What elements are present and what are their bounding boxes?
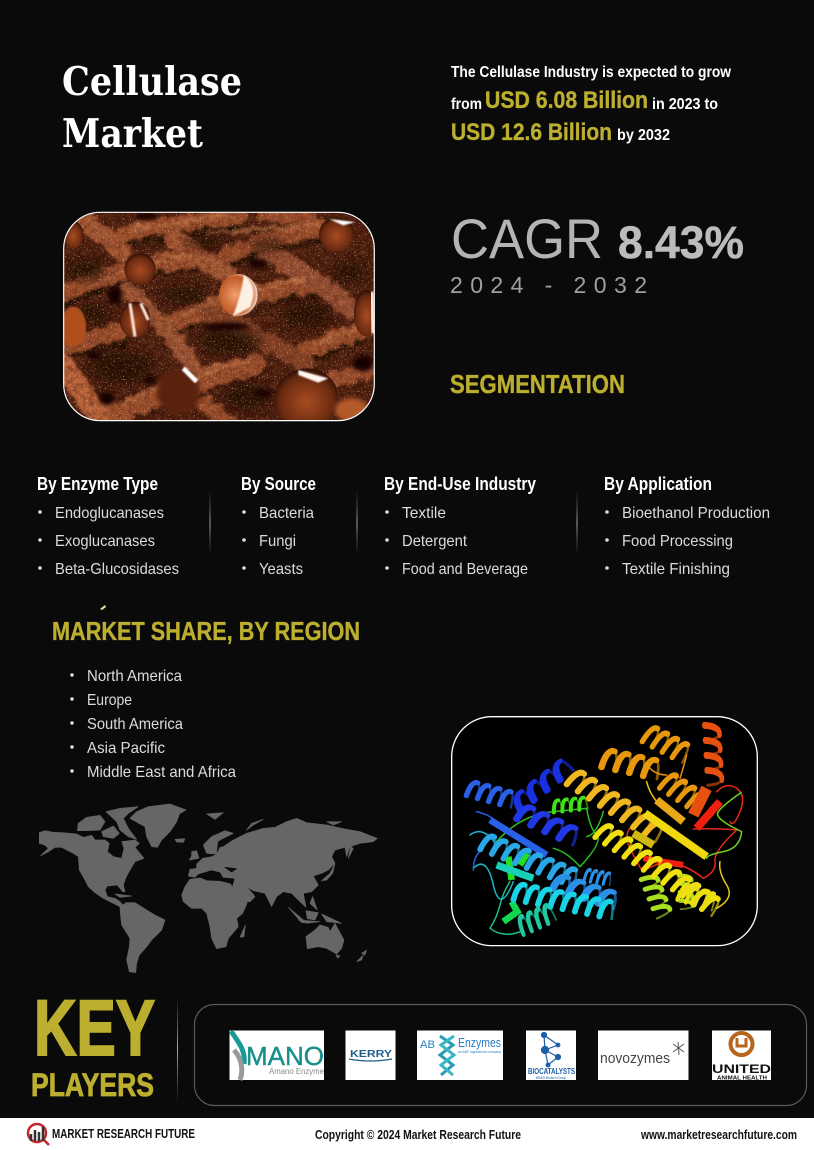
segment column: by application: Bioethanol Production xyxy=(622,505,770,522)
region list xyxy=(70,668,236,781)
photo: cellulose fibres with droplets xyxy=(57,212,379,430)
logo: Biocatalysts: BIOCATALYSTS xyxy=(528,1067,576,1076)
dark cell shadows xyxy=(67,235,367,410)
dark blue helix xyxy=(512,758,573,811)
azure helices xyxy=(552,869,618,909)
segment column: by source: Bacteria xyxy=(259,505,314,522)
segment column: by enzyme type: By Enzyme Type xyxy=(37,474,158,494)
region list: South America xyxy=(87,716,183,733)
green accents xyxy=(503,853,527,922)
logo: Kerry xyxy=(346,1030,396,1080)
market forecast text: USD 12.6 Billion xyxy=(451,119,612,146)
water cut-outs xyxy=(217,840,237,872)
segment column: by end-use industry: Detergent xyxy=(402,533,468,550)
CAGR figure xyxy=(450,207,744,298)
key players heading: KEY xyxy=(34,983,155,1072)
footer bar xyxy=(0,1118,814,1150)
title: Market xyxy=(62,111,203,157)
cyan helix xyxy=(513,883,615,919)
Greenland xyxy=(130,804,186,847)
lime helices xyxy=(641,874,693,918)
market forecast text: The Cellulase Industry is expected to grow xyxy=(451,64,731,81)
logo: Biocatalysts: BRAIN Biotech Group xyxy=(536,1076,566,1080)
logo: AB Enzymes: an ABF ingredients company xyxy=(458,1049,501,1054)
world map xyxy=(39,804,377,973)
region list: North America xyxy=(87,668,182,685)
Eurasia xyxy=(188,818,377,907)
gold helix xyxy=(567,769,665,842)
key players heading xyxy=(31,983,155,1103)
Africa xyxy=(182,878,247,949)
light blue helices xyxy=(480,834,579,887)
key players panel xyxy=(194,1004,806,1106)
logo: Novozymes: novozymes xyxy=(600,1050,670,1067)
segment column: by application: Textile Finishing xyxy=(622,561,730,578)
segment column: by end-use industry: Food and Beverage xyxy=(402,561,528,578)
CAGR figure: 2024 - 2032 xyxy=(450,272,647,298)
region list: Asia Pacific xyxy=(87,740,165,757)
segment column: by source: By Source xyxy=(241,474,316,494)
teal-green helix xyxy=(517,904,556,934)
logo: United Animal Health xyxy=(712,1030,771,1082)
logo: Amano: Amano Enzyme xyxy=(269,1067,325,1076)
logo: United Animal Health: UNITED xyxy=(712,1062,771,1076)
market forecast text: in 2023 to xyxy=(652,96,718,113)
logo: AB Enzymes: Enzymes xyxy=(458,1035,501,1050)
market forecast text: by 2032 xyxy=(617,127,670,144)
logo: Amano xyxy=(230,1030,325,1080)
Arctic islands xyxy=(77,807,138,839)
market forecast text: USD 6.08 Billion xyxy=(485,87,648,114)
key players heading: PLAYERS xyxy=(31,1067,154,1103)
title xyxy=(62,59,242,157)
segment column: by source: Fungi xyxy=(259,533,296,550)
segment column: by application: By Application xyxy=(604,474,712,494)
South America xyxy=(120,903,165,973)
blue helix xyxy=(466,781,515,808)
footer logo icon xyxy=(28,1124,49,1145)
segment column: by application: Food Processing xyxy=(622,533,733,550)
title: Cellulase xyxy=(62,59,242,105)
Australia xyxy=(306,923,344,954)
yellow helix xyxy=(595,823,721,916)
logo: AB Enzymes xyxy=(417,1030,503,1080)
market share heading: MARKET SHARE, BY REGION xyxy=(52,616,360,646)
segment column: by source: Yeasts xyxy=(259,561,303,578)
segment column: by source xyxy=(241,474,316,578)
segment column: by enzyme type: Beta-Glucosidases xyxy=(55,561,179,578)
red-orange helix xyxy=(693,725,722,815)
segment column: by enzyme type: Exoglucanases xyxy=(55,533,155,550)
teal beta strand xyxy=(497,865,533,878)
footer copyright: Copyright © 2024 Market Research Future xyxy=(315,1128,521,1142)
North America xyxy=(39,831,144,907)
logo: Amano: MANO xyxy=(246,1041,324,1071)
region list: Europe xyxy=(87,692,132,709)
logo: AB Enzymes: AB xyxy=(420,1039,435,1051)
CAGR figure: 8.43% xyxy=(618,217,744,268)
lower yellow helix xyxy=(677,884,717,910)
thin loops xyxy=(470,755,743,934)
logo: Biocatalysts xyxy=(526,1030,576,1080)
logo: Novozymes xyxy=(598,1030,688,1080)
red beta and loops xyxy=(643,802,720,865)
segment column: by end-use industry: Textile xyxy=(402,505,446,522)
beta strands xyxy=(633,800,707,857)
islands xyxy=(115,813,367,962)
market forecast text xyxy=(451,64,731,146)
segment column: by enzyme type xyxy=(37,474,179,578)
segment column: by enzyme type: Endoglucanases xyxy=(55,505,164,522)
segmentation heading: SEGMENTATION xyxy=(450,369,625,399)
footer brand: MARKET RESEARCH FUTURE xyxy=(52,1127,195,1141)
region list: Middle East and Africa xyxy=(87,764,236,781)
CAGR figure: CAGR xyxy=(451,207,603,270)
orange helices xyxy=(601,725,707,812)
segment column: by end-use industry: By End-Use Industry xyxy=(384,474,536,494)
segment column: by end-use industry xyxy=(384,474,536,578)
green helix xyxy=(553,797,588,812)
logo: United Animal Health: ANIMAL HEALTH xyxy=(717,1076,767,1082)
protein structure panel xyxy=(452,717,757,946)
mid blue helices xyxy=(516,804,580,845)
logo: Kerry: KERRY xyxy=(350,1049,392,1060)
segment column: by application xyxy=(604,474,770,578)
market forecast text: from xyxy=(451,96,482,113)
blue beta strand xyxy=(490,820,547,855)
